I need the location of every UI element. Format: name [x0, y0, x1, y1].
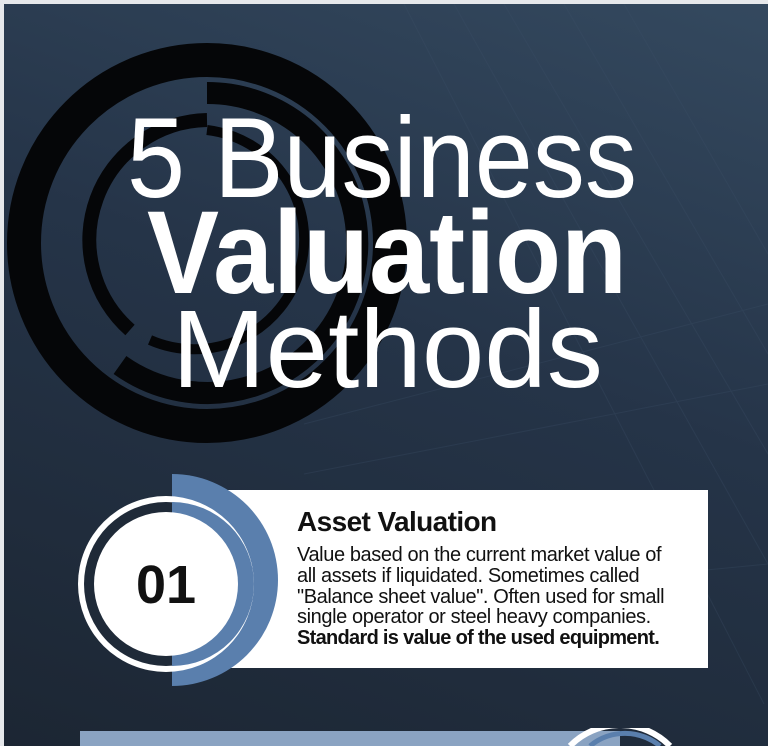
panel: 02 next item (partial) — [80, 728, 672, 746]
description: "Balance sheet value". Often used for small — [297, 586, 664, 608]
number badge: 01 — [136, 555, 196, 615]
description: single operator or steel heavy companies. — [297, 606, 651, 628]
description: all assets if liquidated. Sometimes called — [297, 565, 639, 587]
title — [127, 95, 637, 411]
number badge — [78, 474, 278, 686]
title: Methods — [172, 288, 603, 411]
text box — [227, 490, 708, 668]
description — [297, 544, 664, 649]
title: 5 Business — [127, 95, 637, 222]
description: Standard is value of the used equipment. — [297, 627, 659, 649]
title: Valuation — [147, 187, 627, 319]
description: Value based on the current market value of — [297, 544, 661, 566]
panel: 01 asset valuation — [78, 474, 708, 686]
heading: Asset Valuation — [297, 506, 497, 537]
